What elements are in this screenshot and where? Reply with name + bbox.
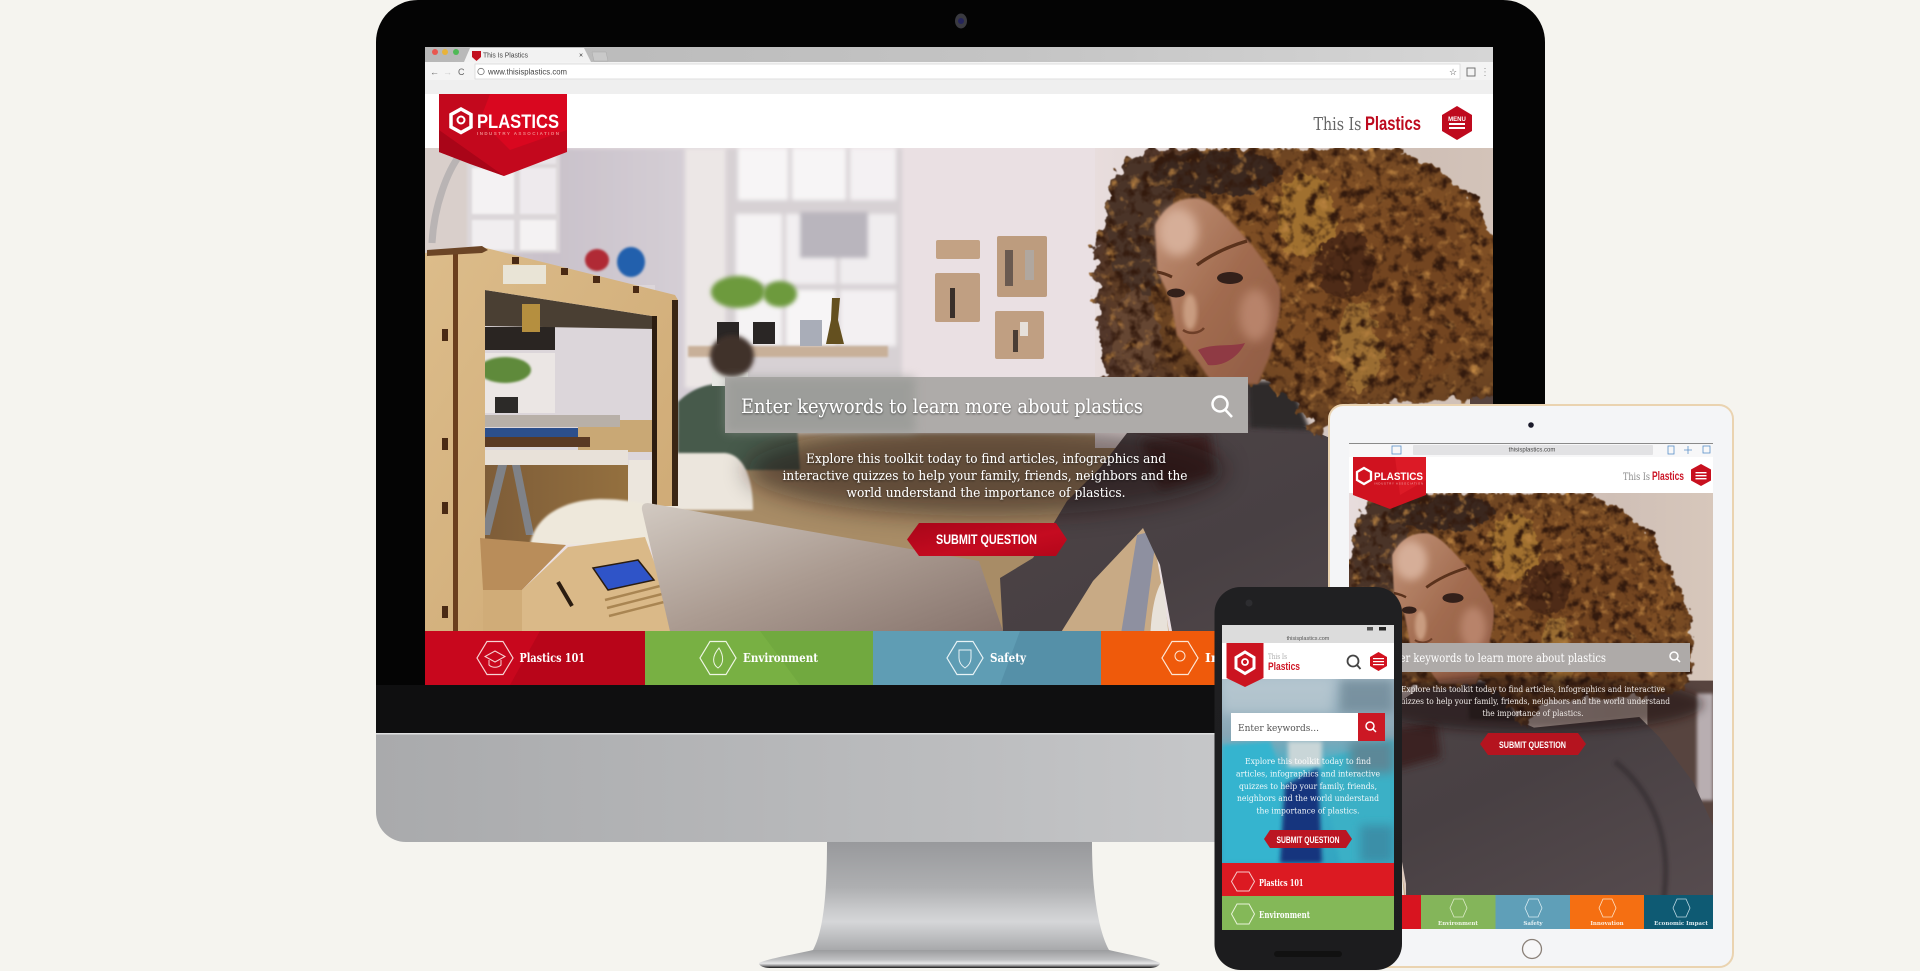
phone website header: [1222, 643, 1394, 679]
nav: Environment: [645, 631, 873, 685]
phone hero blue shirt: [1280, 768, 1322, 863]
phone nav: Environment: Environment: [1259, 910, 1310, 921]
nav: Safety: [873, 631, 1101, 685]
tablet site title accent: Plastics: [1652, 471, 1684, 483]
phone search field: Enter keywords...: [1238, 723, 1319, 734]
search icon: [1212, 396, 1232, 417]
lower bezel sheen: [376, 685, 1545, 733]
tablet menu button: [1691, 464, 1711, 486]
background right of shoulder: [1470, 380, 1565, 660]
phone camera: [1246, 600, 1252, 606]
phone intro paragraph: quizzes to help your family, friends,: [1239, 782, 1377, 792]
browser tab: [464, 48, 608, 62]
phone hero pale sleeve: [1288, 741, 1322, 767]
phone speaker: [1274, 951, 1342, 957]
nav: Plastics 101: [425, 631, 645, 685]
submit button: SUBMIT QUESTION: [936, 531, 1037, 547]
phone search field: [1231, 713, 1385, 741]
phone site title: This Is: [1268, 653, 1287, 661]
tablet nav: Safety: [1496, 895, 1570, 929]
tablet intro paragraph: Explore this toolkit today to find articles, infographics and interactive: [1401, 685, 1665, 695]
phone site title: Plastics: [1268, 661, 1300, 673]
tablet photo of woman: [1349, 493, 1713, 895]
tablet nav: Safety: Safety: [1523, 921, 1543, 927]
lips: [1198, 343, 1245, 365]
tablet intro paragraph: the importance of plastics.: [1482, 709, 1584, 719]
column: [685, 148, 727, 388]
tablet site title: This Is: [1623, 472, 1650, 483]
toolbar icons: [430, 67, 465, 77]
face: [1155, 198, 1280, 384]
site title: This Is: [1314, 114, 1362, 135]
woman: [1000, 148, 1565, 660]
browser chrome: [425, 47, 1493, 94]
menu button: [1442, 106, 1472, 140]
search bar: [725, 377, 1248, 433]
tablet intro paragraph: [1396, 685, 1670, 719]
front white chair: [529, 498, 628, 543]
monitor black bezel: [376, 0, 1545, 733]
tablet nav: Economic Impact: [1644, 895, 1713, 929]
phone nav: Environment: [1222, 896, 1394, 930]
tablet nav: Environment: [1421, 895, 1496, 929]
dark vignette behind text: [746, 424, 1226, 516]
website header: [425, 94, 1493, 148]
nav: Innovation: [1101, 631, 1329, 685]
phone browser bar: thisisplastics.com: [1287, 636, 1330, 642]
intro paragraph: world understand the importance of plastics.: [846, 486, 1126, 501]
tablet submit button: SUBMIT QUESTION: [1499, 740, 1566, 750]
nav: Environment: Environment: [743, 650, 818, 665]
tablet intro paragraph: quizzes to help your family, friends, neighbors and the world understand: [1396, 697, 1670, 707]
phone intro paragraph: Explore this toolkit today to find: [1245, 757, 1372, 767]
phone intro paragraph: the importance of plastics.: [1256, 806, 1360, 816]
desk and wood floor: [680, 433, 1120, 640]
window dots: [432, 49, 459, 55]
tablet browser bar: [1349, 443, 1713, 457]
phone menu button: [1370, 652, 1387, 671]
phone nav: Plastics 101: Plastics 101: [1259, 878, 1304, 889]
phone intro paragraph: articles, infographics and interactive: [1236, 770, 1380, 780]
centre window: [726, 148, 902, 380]
phone intro paragraph: [1236, 757, 1380, 816]
phone body: [1214, 587, 1402, 970]
wood floor gap beside arm: [1040, 515, 1172, 650]
phone hero photo: [1222, 679, 1394, 863]
phone hero gloved hands: [1222, 740, 1394, 863]
address bar: www.thisisplastics.com: [487, 68, 567, 76]
browser tab: This Is Plastics: [483, 50, 528, 60]
tablet logo badge: PLASTICS: [1374, 471, 1423, 483]
eyebrows: [1197, 241, 1247, 265]
phone hero gradient: [1222, 679, 1394, 863]
address bar: ☆: [1449, 67, 1457, 77]
browser tab: ×: [579, 52, 583, 60]
phone nav: Plastics 101: [1222, 863, 1394, 896]
nav: Plastics 101: Plastics 101: [520, 650, 585, 665]
monitor stand: [759, 842, 1160, 968]
chin highlight: [376, 733, 1545, 734]
monitor silver chin: [376, 733, 1545, 842]
wall behind woman: [1095, 148, 1565, 448]
tablet category navigation: [1349, 895, 1713, 929]
phone hero upper shading: [1340, 679, 1394, 713]
intro paragraph: interactive quizzes to help your family, friends, neighbors and the: [782, 469, 1188, 484]
nav: Safety: Safety: [990, 650, 1027, 665]
rear white chair: [628, 453, 753, 510]
extension icons: [1467, 68, 1485, 76]
intro paragraph: [782, 452, 1188, 501]
tablet dark vignette: [1363, 676, 1703, 732]
website logo badge: INDUSTRY ASSOCIATION: [477, 131, 559, 136]
category navigation bar: [425, 631, 1329, 685]
toolbar: [425, 62, 1493, 80]
left window: [467, 148, 560, 253]
webcam: [955, 14, 967, 28]
left wall: [506, 148, 696, 466]
tablet search bar: Enter keywords to learn more about plastics: [1382, 651, 1606, 665]
address bar: [475, 64, 1460, 79]
tablet nav: Environment: Environment: [1438, 921, 1478, 927]
tablet body: [1329, 405, 1733, 967]
printer wood frame: [425, 246, 678, 640]
tablet submit button: [1480, 733, 1586, 755]
tablet nav: Economic Impact: Economic Impact: [1654, 921, 1708, 927]
logo hexagon mark: [451, 109, 471, 132]
site title accent: Plastics: [1365, 114, 1421, 135]
sweater: [1000, 381, 1565, 650]
phone submit button: [1264, 830, 1352, 848]
person seen from behind: [678, 335, 800, 470]
desktop monitor: [376, 0, 1565, 968]
phone browser bar: [1222, 625, 1394, 643]
tab strip: [425, 47, 1493, 62]
nose shadow: [1183, 328, 1204, 333]
phone site title: [1268, 653, 1300, 673]
tablet camera: [1528, 422, 1534, 428]
hair: [1093, 148, 1526, 438]
search bar: Enter keywords to learn more about plastics: [741, 394, 1143, 418]
shelf with plants: [688, 276, 888, 357]
tablet logo badge: [1353, 457, 1426, 509]
room wall: [522, 148, 1172, 631]
phone submit button: SUBMIT QUESTION: [1276, 835, 1340, 845]
tablet search bar: [1372, 643, 1690, 672]
menu button: MENU: [1448, 117, 1466, 123]
toolbar icons: C: [458, 67, 465, 77]
printer control box: [480, 537, 672, 640]
printer interior: [478, 285, 655, 543]
eyes: [1217, 272, 1243, 284]
tablet nav: Innovation: Innovation: [1590, 921, 1624, 927]
website logo badge: [439, 94, 567, 176]
website logo badge: PLASTICS: [477, 112, 559, 133]
laptop: [642, 503, 1006, 640]
tablet home button: [1522, 940, 1542, 958]
tablet browser bar: thisisplastics.com: [1509, 448, 1555, 454]
tablet hero photo: [1349, 493, 1713, 895]
smartphone: [1214, 587, 1402, 970]
printer cable: [432, 155, 460, 243]
phone search icon: [1348, 656, 1360, 669]
tablet: [1328, 404, 1734, 968]
tablet nav: Innovation: [1570, 895, 1644, 929]
toolbar icons: ←: [430, 67, 439, 77]
intro paragraph: Explore this toolkit today to find articles, infographics and: [806, 452, 1166, 467]
tablet website header: [1349, 457, 1713, 493]
nav: Innovation: Innovation: [1205, 650, 1281, 665]
phone intro paragraph: neighbors and the world understand: [1237, 794, 1379, 804]
phone logo badge: [1226, 643, 1264, 687]
device mockup scene: [376, 0, 1734, 970]
submit button: [907, 523, 1067, 556]
toolbar icons: →: [443, 67, 452, 77]
wall boards: [935, 236, 1047, 359]
red and blue wall discs: [585, 247, 645, 277]
tablet wall: [1402, 862, 1406, 895]
tablet logo badge: INDUSTRY ASSOCIATION: [1374, 482, 1423, 486]
hero photo: [425, 148, 1493, 631]
